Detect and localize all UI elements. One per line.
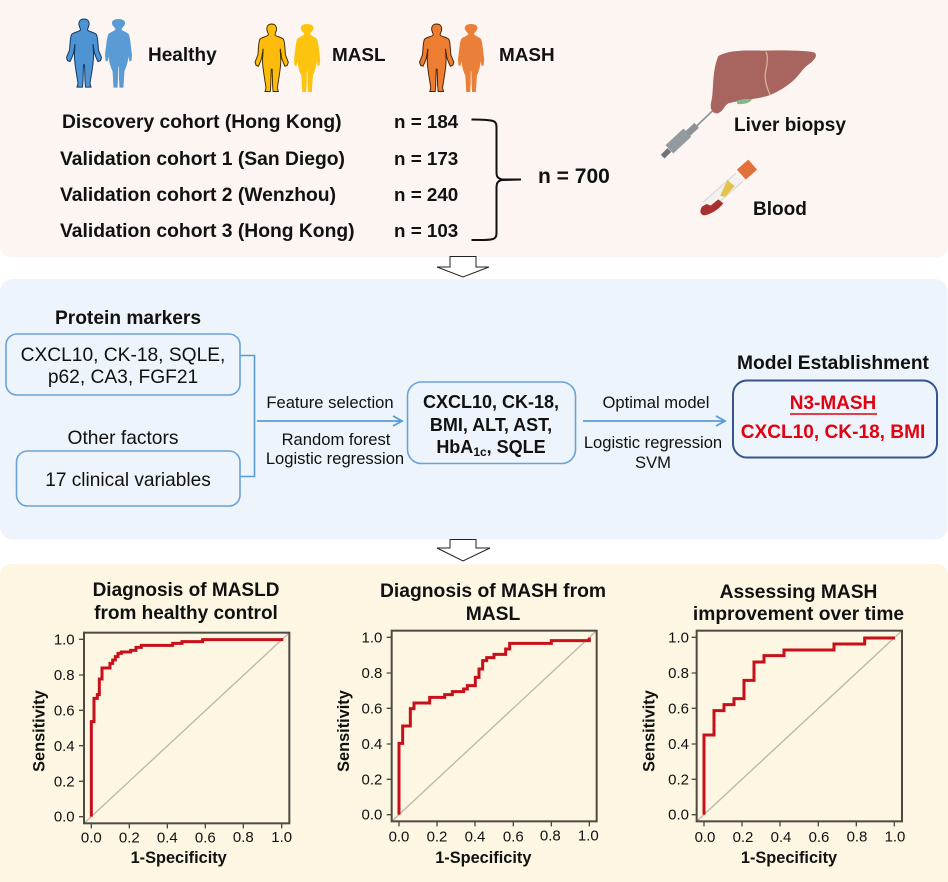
chart: ROC MASH improvement — [641, 630, 905, 867]
total count: n = 700 — [538, 165, 610, 188]
title: chart 1 — [93, 580, 279, 624]
icon: blood tube — [700, 165, 753, 215]
panel: ROC results — [0, 564, 948, 882]
title: chart 2 — [380, 581, 606, 625]
chart: ROC MASH improvement: 1.0 — [668, 630, 689, 647]
label: healthy: Healthy — [148, 45, 217, 66]
chart: ROC MASLD vs healthy: 0.8 — [54, 667, 75, 684]
chart: ROC MASH vs MASL — [335, 630, 599, 867]
chart: ROC MASLD vs healthy: 1.0 — [271, 829, 292, 846]
title: chart 3: Assessing MASH — [720, 582, 877, 603]
chart: ROC MASLD vs healthy: 0.8 — [233, 829, 254, 846]
chart: ROC MASH vs MASL: 0.4 — [465, 828, 485, 845]
chart: ROC MASH vs MASL: 0.2 — [361, 771, 382, 788]
chart: ROC MASH improvement: 0.6 — [668, 701, 689, 718]
panel: model building — [0, 279, 948, 540]
chart: ROC MASH vs MASL: 1.0 — [578, 828, 599, 845]
label: selection methods — [266, 430, 404, 468]
cohort counts: n = 173 — [394, 148, 458, 169]
icon: MASL people — [255, 24, 320, 92]
chart: ROC MASH vs MASL: 0.8 — [361, 665, 382, 682]
chart: ROC MASH improvement: 0.0 — [695, 829, 715, 846]
arrow: cohorts to markers — [437, 256, 489, 277]
connector bracket — [240, 356, 254, 476]
heading: protein markers: Protein markers — [55, 308, 201, 329]
label: blood: Blood — [753, 199, 807, 220]
chart: ROC MASH vs MASL: 0.8 — [540, 828, 561, 845]
box: final model: N3-MASH — [790, 393, 876, 414]
chart: ROC MASLD vs healthy: 0.0 — [81, 830, 102, 847]
chart: ROC MASLD vs healthy: 0.4 — [54, 738, 75, 755]
label: MASH: MASH — [499, 45, 555, 66]
chart: ROC MASH improvement: 0.2 — [733, 829, 753, 846]
label: selection methods: Random forest — [282, 430, 391, 449]
cohort list: Validation cohort 1 (San Diego) — [60, 149, 345, 170]
cohort counts: n = 103 — [394, 220, 458, 241]
chart: ROC MASH improvement: 0.8 — [668, 665, 689, 682]
label: model methods — [584, 433, 722, 472]
cohort counts: n = 184 — [394, 111, 459, 132]
arrow: feature selection — [257, 416, 402, 426]
heading: model establishment: Model Establishment — [737, 353, 930, 374]
chart: ROC MASH vs MASL: Sensitivity — [335, 690, 353, 772]
label: feature selection: Feature selection — [266, 393, 394, 412]
arrow: optimal model — [583, 416, 725, 426]
cohort list: Discovery cohort (Hong Kong) — [62, 112, 342, 133]
box: selected features: HbA — [436, 437, 473, 457]
box: clinical variables — [16, 451, 240, 506]
chart: ROC MASLD vs healthy: 0.2 — [119, 830, 140, 847]
cohort list — [60, 112, 355, 242]
title: chart 2: Diagnosis of MASH from — [380, 581, 606, 602]
box: protein markers: CXCL10, CK-18, SQLE, — [21, 345, 225, 366]
chart: ROC MASLD vs healthy: Sensitivity — [30, 690, 48, 772]
box: final model: CXCL10, CK-18, BMI — [741, 422, 925, 443]
chart: ROC MASH improvement: 0.6 — [809, 829, 829, 846]
chart: ROC MASLD vs healthy — [30, 632, 292, 867]
box: selected features: CXCL10, CK-18, — [423, 392, 559, 412]
chart: ROC MASLD vs healthy: 0.6 — [54, 703, 75, 720]
chart: ROC MASH improvement: 0.4 — [771, 829, 791, 846]
box: final model — [733, 380, 937, 458]
brace — [472, 120, 521, 240]
chart: ROC MASH vs MASL: 0.0 — [361, 807, 382, 824]
chart: ROC MASH vs MASL: 0.4 — [361, 736, 382, 753]
box: selected features: 1c — [473, 445, 487, 459]
chart: ROC MASH improvement: 1.0 — [885, 828, 905, 845]
title: chart 1: Diagnosis of MASLD — [93, 580, 279, 601]
chart: ROC MASLD vs healthy: 0.6 — [195, 830, 216, 847]
cohort counts — [394, 111, 459, 241]
box: selected features: , SQLE — [487, 437, 546, 457]
chart: ROC MASLD vs healthy: 0.0 — [54, 809, 75, 826]
box: protein markers — [6, 334, 240, 395]
chart: ROC MASH vs MASL: 1-Specificity — [435, 849, 531, 867]
icon: liver and biopsy needle — [663, 50, 816, 157]
label: model methods: Logistic regression — [584, 433, 722, 452]
chart: ROC MASH vs MASL: 0.2 — [427, 828, 447, 845]
title: chart 1: from healthy control — [94, 603, 278, 624]
arrow: model to validation — [437, 540, 490, 561]
chart: ROC MASH improvement: Sensitivity — [641, 690, 659, 772]
cohort list: Validation cohort 2 (Wenzhou) — [60, 185, 336, 206]
chart: ROC MASH improvement: 0.0 — [668, 807, 689, 824]
chart: ROC MASH improvement: 0.8 — [847, 828, 867, 845]
label: optimal model: Optimal model — [603, 393, 709, 412]
label: liver biopsy: Liver biopsy — [734, 115, 846, 136]
chart: ROC MASH improvement: 0.4 — [668, 736, 689, 753]
chart: ROC MASH vs MASL: 0.6 — [503, 828, 524, 845]
chart: ROC MASLD vs healthy: 1-Specificity — [131, 849, 227, 867]
label: MASL: MASL — [332, 45, 386, 66]
chart: ROC MASH vs MASL: 1.0 — [361, 630, 382, 647]
icon: MASH people — [420, 24, 484, 92]
box: clinical variables: 17 clinical variables — [45, 470, 211, 491]
chart: ROC MASH vs MASL: 0.6 — [361, 701, 382, 718]
panel: study cohorts — [0, 0, 948, 257]
chart: ROC MASH improvement: 0.2 — [668, 771, 689, 788]
cohort counts: n = 240 — [394, 184, 458, 205]
box: protein markers: p62, CA3, FGF21 — [48, 367, 198, 388]
chart: ROC MASH vs MASL: 0.0 — [389, 828, 409, 845]
icon: healthy people — [66, 19, 132, 88]
cohort list: Validation cohort 3 (Hong Kong) — [60, 221, 355, 242]
chart: ROC MASLD vs healthy: 0.4 — [157, 830, 178, 847]
label: selection methods: Logistic regression — [266, 449, 404, 468]
box: selected features — [408, 382, 576, 464]
chart: ROC MASLD vs healthy: 1.0 — [54, 632, 75, 649]
chart: ROC MASH improvement: 1-Specificity — [741, 849, 837, 867]
label: model methods: SVM — [635, 453, 671, 472]
heading: other factors: Other factors — [68, 428, 178, 449]
chart: ROC MASLD vs healthy: 0.2 — [54, 773, 75, 790]
box: selected features: BMI, ALT, AST, — [430, 415, 552, 435]
title: chart 2: MASL — [466, 604, 521, 625]
title: chart 3 — [693, 582, 904, 625]
title: chart 3: improvement over time — [693, 604, 904, 625]
